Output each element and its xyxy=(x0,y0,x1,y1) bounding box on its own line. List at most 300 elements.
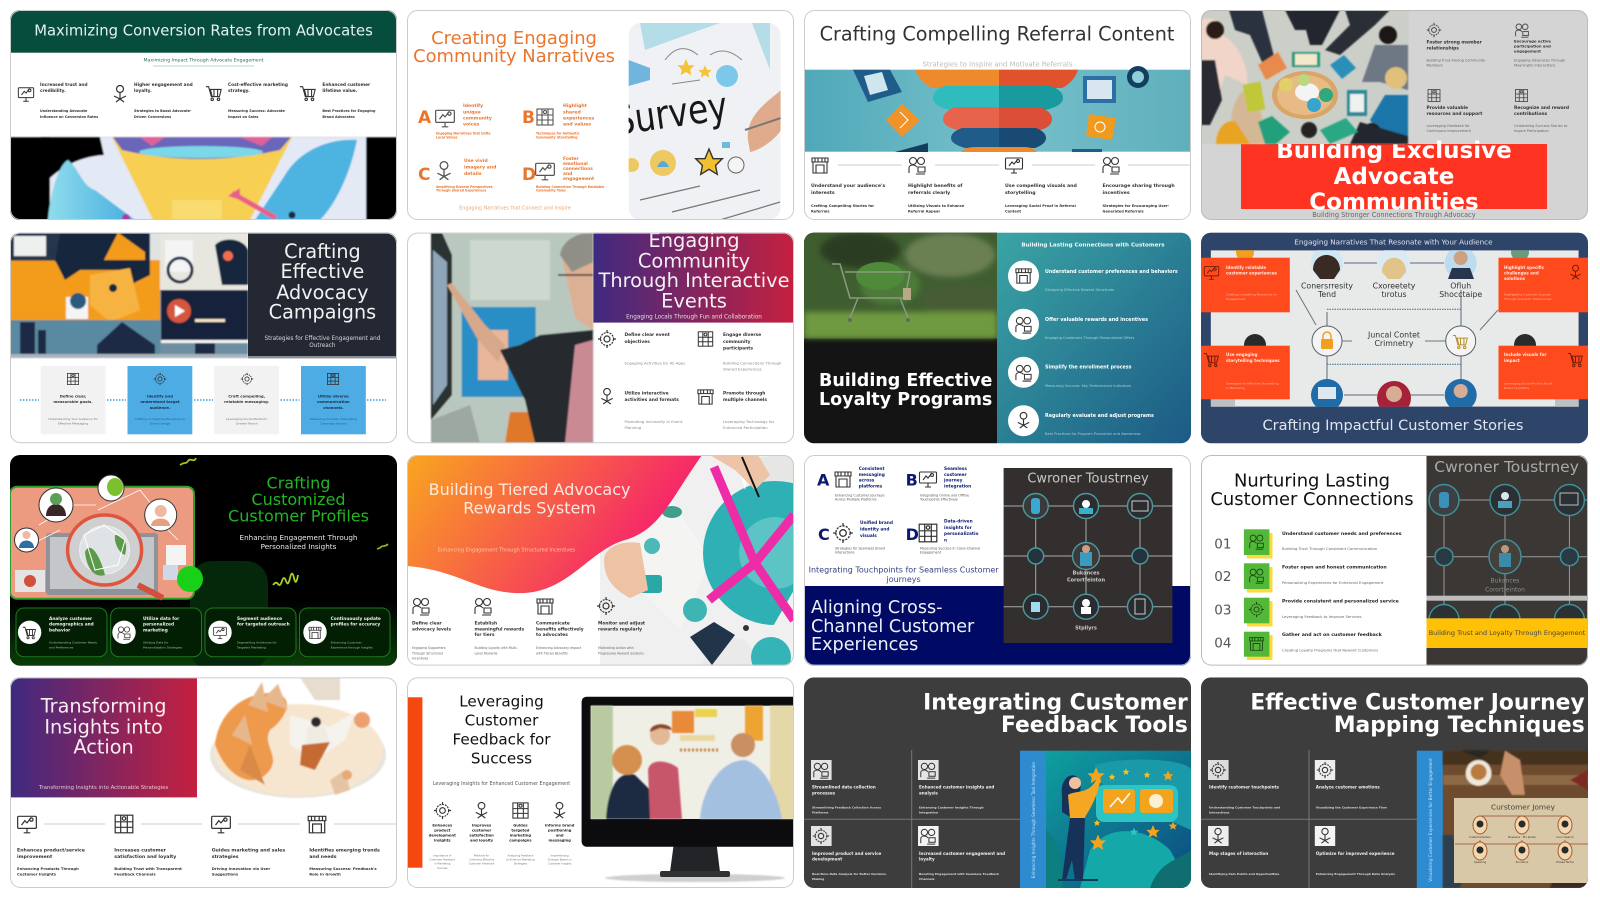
image: survey form and hand xyxy=(628,23,781,219)
image: collage illustration xyxy=(10,233,248,358)
item: enrollment xyxy=(1008,357,1132,388)
item: activities: activities and formats xyxy=(624,397,679,403)
column: brand: Customer Insights xyxy=(548,862,572,866)
column: brand: Implementing xyxy=(551,854,569,858)
column: brand: and xyxy=(556,834,564,838)
row 01: 01 xyxy=(1214,536,1231,552)
item C: C xyxy=(818,525,830,544)
title: Effective xyxy=(281,260,364,283)
column: rewards: for tiers xyxy=(474,632,495,638)
panel: Leveraging Customer Feedback for Success xyxy=(407,677,802,888)
item: participants xyxy=(698,332,782,372)
card: messaging: Leveraging Social Media for xyxy=(226,417,268,421)
item C xyxy=(818,520,893,554)
row 04: Gather and act on customer feedback xyxy=(1282,632,1383,638)
item D xyxy=(522,156,604,192)
connector dots xyxy=(20,399,386,401)
item C: Amplifying Diverse Perspectives xyxy=(436,185,493,189)
step 4 xyxy=(308,816,380,876)
title box xyxy=(1241,144,1547,209)
title: Community xyxy=(638,250,750,272)
column: product: in Marketing xyxy=(434,862,451,866)
image: funnel illustration xyxy=(10,137,397,222)
step 1: improvement xyxy=(17,854,53,860)
item C: imagery and xyxy=(464,165,496,171)
column: benefits: to advocates xyxy=(536,632,568,638)
column: brand: positioning xyxy=(548,828,572,832)
dark green backdrop xyxy=(10,600,397,666)
title: Customer xyxy=(465,712,539,730)
diagram: customer journey board: Corortfeinton xyxy=(1067,578,1105,584)
title: Action xyxy=(73,735,134,758)
process line xyxy=(838,164,1190,166)
item: preferences: Understand customer preferences and behaviors xyxy=(1045,269,1178,275)
step 1 xyxy=(17,816,85,876)
right panel xyxy=(997,233,1191,444)
callout: experiences: customer experiences xyxy=(1226,270,1277,276)
column: monitor: Progressive Reward Systems xyxy=(598,651,644,655)
item D: emotional xyxy=(563,161,588,167)
item: objectives: Engaging Activities for All Ages xyxy=(624,360,685,366)
item: relationships: Members xyxy=(1426,64,1443,68)
title: Crafting xyxy=(284,240,361,263)
item D xyxy=(906,518,980,554)
item: recognition: contributions xyxy=(1514,111,1548,117)
column: campaigns: to Enhance Marketing xyxy=(506,858,535,862)
callout: experiences xyxy=(1201,258,1290,312)
column: campaigns: Guides xyxy=(513,824,528,828)
card: data: Utilize data for xyxy=(143,616,180,622)
item: recognition: Celebrating Success Stories to xyxy=(1514,124,1567,128)
cell: insights: Integration xyxy=(919,811,938,815)
title: Feedback for xyxy=(452,730,551,748)
item B: B xyxy=(522,108,535,128)
column: campaigns: marketing xyxy=(510,834,531,838)
column: rewards: Building Loyalty with Multi- xyxy=(474,646,518,650)
callout: storytelling: storytelling techniques xyxy=(1226,358,1280,363)
card: data: marketing xyxy=(143,627,168,633)
item: cost: Cost-effective marketing xyxy=(228,82,288,88)
item: resources: Provide valuable xyxy=(1426,105,1468,111)
diagram: customer network xyxy=(1211,243,1579,415)
column: levels xyxy=(411,598,451,660)
card: demographics: Analyze customer xyxy=(49,616,93,622)
item C: Through Shared Experiences xyxy=(436,188,486,192)
step 1: Referrals xyxy=(811,210,830,214)
column: monitor xyxy=(597,597,645,655)
title: Mapping Techniques xyxy=(1334,713,1585,738)
diagram: customer journey board: Bukances xyxy=(1491,578,1519,585)
gradient wave xyxy=(407,455,702,593)
column: satisfaction: and loyalty xyxy=(470,838,494,842)
item A: Enhancing Customer Journeys xyxy=(835,493,885,497)
item: activities: Planning xyxy=(624,425,642,430)
column: rewards: Level Rewards xyxy=(474,651,498,655)
card: demographics: behavior xyxy=(49,627,71,633)
step 1: Enhances product/service xyxy=(17,848,85,854)
column: brand: Informs brand xyxy=(545,824,575,828)
card: audience: understand target xyxy=(140,399,180,404)
cell: product xyxy=(811,826,888,881)
title: Advocate xyxy=(1334,164,1454,190)
panel: Creating Engaging Community Narratives xyxy=(414,23,781,219)
title: Nurturing Lasting xyxy=(1234,471,1390,492)
item: participation: Meaningful Interactions xyxy=(1514,64,1555,68)
item: evaluate: Regularly evaluate and adjust programs xyxy=(1045,413,1154,419)
cell: stages: Map stages of interaction xyxy=(1209,851,1268,856)
item D: connections xyxy=(563,166,593,172)
step 2: Utilizing Visuals to Enhance xyxy=(908,204,965,208)
diagram: customer journey board xyxy=(1004,468,1172,643)
subtitle: Strategies for Effective Engagement and xyxy=(264,336,381,342)
diagram: customer network: Ofluh xyxy=(1450,282,1471,290)
title: Advocacy xyxy=(276,281,369,304)
card: audience: Drive Change xyxy=(150,421,170,425)
item: trust xyxy=(18,82,98,119)
column: product: Customer Feedback xyxy=(429,858,456,862)
process line xyxy=(44,823,397,825)
panel heading: Building Lasting Connections with Customers xyxy=(1021,242,1165,248)
diagram: customer network: Juncal Contet xyxy=(1367,330,1420,340)
column: benefits xyxy=(536,599,584,655)
image: profile search illustration xyxy=(10,475,194,599)
step 3: Suggestions xyxy=(212,872,239,876)
callout: challenges: Through Authentic Testimonials xyxy=(1503,297,1552,301)
cell: data collection: Streamlining Feedback Collection Across xyxy=(812,806,881,810)
card: audience: Identify and xyxy=(147,394,173,398)
step 3: Driving Innovation via User xyxy=(212,866,270,871)
item: rewards xyxy=(1008,309,1148,340)
row 02: Personalizing Experiences for Enhanced Engagement xyxy=(1282,580,1384,585)
item: preferences xyxy=(1008,260,1178,292)
grid lines xyxy=(1201,750,1417,888)
diagram: customer journey board: Stpllyrs xyxy=(1075,626,1097,632)
item: cost: strategy. xyxy=(228,88,250,94)
callout: storytelling: Use engaging xyxy=(1226,352,1258,357)
item B: experiences xyxy=(563,116,595,122)
column: product: insights xyxy=(434,838,451,842)
title: Building Effective xyxy=(819,371,993,391)
subtitle: Personalized Insights xyxy=(261,542,337,551)
cell: data collection: processes xyxy=(812,790,836,795)
title: Crafting xyxy=(267,474,330,492)
step 1: Customer Insights xyxy=(17,872,57,876)
item B: Techniques for Authentic xyxy=(536,132,580,136)
row 01: Building Trust Through Consistent Communication xyxy=(1282,546,1378,551)
card: channels: Measuring Success: Evaluating xyxy=(310,417,357,421)
item: participation: Engaging Advocates Through xyxy=(1514,58,1565,62)
item: preferences: Designing Effective Reward Structures xyxy=(1045,288,1114,292)
item: recognition: Recognize and reward xyxy=(1514,105,1569,111)
item: participation xyxy=(1514,24,1565,68)
item: participants: Building Connections Through xyxy=(723,360,782,366)
subtitle: Engaging Locals Through Fun and Collaboration xyxy=(626,314,762,320)
column: satisfaction xyxy=(469,802,495,866)
subtitle: Building Stronger Connections Through Advocacy xyxy=(1312,211,1476,219)
subtitle: Enhancing Engagement Through Structured Incentives xyxy=(438,548,575,554)
diagram: customer network: Conersrresity xyxy=(1301,282,1353,290)
cell: product: Making xyxy=(812,877,824,881)
item: relationships: relationships xyxy=(1426,46,1459,52)
card: demographics: and Preferences xyxy=(49,645,74,649)
column: product: product xyxy=(434,828,451,832)
title band xyxy=(10,10,397,53)
callout: visuals: Brand Credibility xyxy=(1504,386,1529,390)
callout: challenges xyxy=(1498,258,1588,312)
panel: Transforming Insights into Action xyxy=(10,677,397,888)
diagram: customer network: Shocctaipe xyxy=(1439,290,1482,299)
accent bar xyxy=(407,697,422,868)
panel: Crafting Impactful Customer Stories xyxy=(1201,233,1588,444)
item D: personalizatio xyxy=(944,531,978,537)
item: resources: Leveraging Feedback for xyxy=(1426,124,1470,128)
card: segments xyxy=(205,608,296,657)
card: updates: Continuously update xyxy=(331,616,381,622)
item: engagement xyxy=(114,82,193,119)
panel: Building Effective Loyalty Programs xyxy=(804,232,1191,444)
column: campaigns: targeted xyxy=(511,828,530,832)
column: benefits: Communicate xyxy=(536,621,570,627)
item: relationships: Foster strong member xyxy=(1426,40,1483,46)
card: goals: Effective Messaging xyxy=(58,421,88,425)
diagram: customer network: tırotus xyxy=(1381,290,1407,299)
column: rewards: Establish xyxy=(474,621,497,627)
item: relationships xyxy=(1426,23,1485,68)
item B: Seamless xyxy=(944,466,967,472)
side bar xyxy=(1417,751,1443,889)
card: updates: Enhancing Customer xyxy=(331,640,363,644)
step 4: Identifies emerging trends xyxy=(309,848,380,854)
column: brand: Changes Based on xyxy=(548,858,572,862)
cell: product: development xyxy=(812,857,842,862)
image: woman rating with stars xyxy=(1046,751,1191,889)
item D: insights for xyxy=(944,525,973,531)
title block xyxy=(248,233,397,356)
item: cost: Impact on Sales xyxy=(228,115,258,119)
item: enrollment: Measuring Success: Key Performance Indicators xyxy=(1045,384,1131,388)
image: journey map on wooden table: Customerization xyxy=(1469,835,1491,839)
title: Engaging xyxy=(648,229,740,252)
callout: storytelling xyxy=(1201,346,1290,399)
callout: challenges: Highlighting Customer Success xyxy=(1504,292,1551,296)
item: evaluate xyxy=(1008,405,1154,436)
step 4: Encourage sharing through xyxy=(1102,183,1175,189)
item: lifetime value: Best Practices for Engaging xyxy=(322,109,376,113)
card: goals: Understanding Your Audience for xyxy=(48,417,98,421)
title: Community Narratives xyxy=(413,46,615,67)
step 2 xyxy=(908,158,965,214)
card: demographics xyxy=(16,608,107,657)
item: engagement: Driven Conversions xyxy=(134,115,171,119)
title: Through Interactive xyxy=(597,269,790,292)
image: hand xyxy=(604,542,648,598)
callout: challenges: solutions xyxy=(1504,276,1526,281)
column: satisfaction: Methods for xyxy=(474,854,490,858)
item B xyxy=(906,466,971,501)
item B: and values xyxy=(563,122,591,128)
item D: Engagement xyxy=(920,550,942,554)
cell: data collection xyxy=(811,760,881,815)
cell: engagement: loyalty xyxy=(919,857,935,862)
banner: Building Trust and Loyalty Through Engagement xyxy=(1429,629,1586,637)
title: Insights into xyxy=(44,715,163,738)
item: enrollment: Simplify the enrollment process xyxy=(1045,364,1132,370)
card: audience xyxy=(128,366,192,434)
column: satisfaction: customer xyxy=(472,828,492,832)
item: engagement: loyalty. xyxy=(134,88,152,94)
heading: Engaging Narratives That Resonate with Your Audience xyxy=(1294,237,1493,246)
item: objectives: Define clear event xyxy=(624,332,670,338)
step 3: Use compelling visuals and xyxy=(1005,183,1077,189)
step 2: Building Trust with Transparent xyxy=(114,866,182,871)
title: Channel Customer xyxy=(811,617,975,637)
footer caption: Engaging Narratives that Connect and Inspire xyxy=(459,206,571,212)
subtitle: Enhancing Engagement Through xyxy=(240,533,357,542)
panel: Aligning Cross-Channel Customer Experiences xyxy=(804,455,1191,666)
side bar: Enhancing Insights Through Seamless Tool Integration xyxy=(1031,761,1037,878)
item A xyxy=(418,103,492,140)
card: goals: measurable goals. xyxy=(53,399,93,404)
item: recognition: Inspire Participation xyxy=(1514,129,1549,133)
diagram: customer journey board: Bukances xyxy=(1073,570,1100,576)
card: goals xyxy=(41,366,106,434)
item D: D xyxy=(906,525,919,544)
column: rewards: meaningful rewards xyxy=(474,626,524,632)
column: satisfaction: Collecting Effective xyxy=(469,858,495,862)
step 4: Generated Referrals xyxy=(1102,210,1144,214)
panel: Building Tiered Advocacy Rewards System xyxy=(407,455,847,677)
panel: Integrating Customer Feedback Tools xyxy=(804,677,1191,889)
step 3 xyxy=(1005,158,1077,214)
row 02: 02 xyxy=(1214,569,1231,585)
banner xyxy=(1426,618,1588,648)
item A: A xyxy=(817,471,830,490)
column: levels: Engaging Supporters xyxy=(412,646,446,650)
callout: challenges: Highlight specific xyxy=(1504,265,1545,270)
item D: D xyxy=(522,165,536,185)
item: participation: participation and xyxy=(1514,44,1551,48)
cell: emotions xyxy=(1315,760,1387,810)
column: benefits: Enhancing Advocacy Impact xyxy=(536,646,582,650)
title: Crafting Impactful Customer Stories xyxy=(1263,418,1523,434)
item A xyxy=(817,466,885,501)
title: Aligning Cross- xyxy=(811,598,943,618)
card: demographics: demographics and xyxy=(49,622,94,628)
callout: experiences: Crafting Compelling Narratives for xyxy=(1226,292,1278,296)
diagram: customer network: Crimnetry xyxy=(1374,339,1414,348)
card: messaging: Craft compelling, xyxy=(228,394,266,398)
diagram: customer journey board: Corortfeinton xyxy=(1485,587,1525,594)
diagram: customer network: Tend xyxy=(1317,290,1336,299)
item: engagement: Higher engagement and xyxy=(134,82,193,88)
cell: touchpoints: Interactions xyxy=(1209,811,1230,815)
item C: Unified brand xyxy=(860,520,893,526)
card: channels xyxy=(301,366,366,434)
card: segments: Targeted Marketing xyxy=(236,645,266,649)
item B: integration xyxy=(944,484,971,490)
step 2: satisfaction and loyalty xyxy=(114,854,176,860)
column: product xyxy=(429,802,456,870)
item C: Interactions xyxy=(835,550,855,554)
side bar: Visualizing Customer Experiences for Better Engagement xyxy=(1428,758,1434,882)
card: messaging: Greater Reach xyxy=(236,421,258,425)
callout: visuals: Include visuals for xyxy=(1504,352,1546,357)
title: Customer Profiles xyxy=(228,507,369,526)
step 4 xyxy=(1102,158,1175,214)
item: trust: credibility. xyxy=(40,88,66,94)
title: Integrating Customer xyxy=(923,690,1188,715)
step 2: referrals clearly xyxy=(908,190,950,196)
image: survey form and hand: Survey xyxy=(611,82,730,145)
column: product: development xyxy=(429,834,456,838)
card: audience: audience. xyxy=(150,405,171,410)
cell: product: Real-Time Data Analysis for Better Decision- xyxy=(812,872,888,876)
column: monitor: Monitor and adjust xyxy=(598,621,645,627)
cell: engagement: Increased customer engagement and xyxy=(919,851,1005,856)
item A: unique xyxy=(463,110,481,116)
title: Communities xyxy=(1309,190,1479,216)
step 3: Content xyxy=(1005,210,1021,214)
title block xyxy=(10,677,197,797)
step 4: Measuring Success: Feedback's xyxy=(309,866,377,871)
row 03: 03 xyxy=(1214,602,1231,618)
column: monitor: rewards regularly xyxy=(598,626,642,632)
item: channels xyxy=(698,390,775,430)
title: Effective Customer Journey xyxy=(1250,690,1585,715)
title: Success xyxy=(471,749,532,767)
callout: storytelling: Strategies for Effective Storytelling xyxy=(1226,382,1279,386)
card: data: personalized xyxy=(143,622,174,628)
item A: Consistent xyxy=(859,466,885,472)
column: campaigns xyxy=(506,803,535,866)
item A: Engaging Narratives that Unite xyxy=(436,132,490,136)
cell: insights: Enhancing Customer Insights Through xyxy=(919,806,984,810)
item B xyxy=(522,103,595,140)
item: relationships: Building Trust Among Community xyxy=(1426,58,1485,62)
item B: Community Storytelling xyxy=(536,136,577,140)
item: trust: Understanding Advocate xyxy=(40,109,88,113)
item: activities: Promoting Inclusivity in Event xyxy=(624,419,683,424)
panel: Maximizing Conversion Rates from Advocates xyxy=(10,10,397,222)
diagram: customer journey board xyxy=(1426,455,1588,666)
step 4: Strategies for Encouraging User- xyxy=(1102,204,1170,208)
cell: insights xyxy=(918,760,994,815)
column: monitor: Motivating Action with xyxy=(598,646,634,650)
subtitle: journeys xyxy=(885,575,921,584)
item A: across xyxy=(859,478,875,484)
panel: Crafting Effective Advocacy Campaigns xyxy=(10,233,397,444)
item: lifetime value: Brand Advocates xyxy=(322,115,355,119)
cell: engagement: Channels xyxy=(919,877,935,881)
callout: storytelling: in Marketing xyxy=(1226,386,1245,390)
card: data: Personalization Strategies xyxy=(143,645,182,649)
cell: engagement: Boosting Engagement with Seamless Feedback xyxy=(919,872,1000,876)
item A: messaging xyxy=(859,472,885,478)
title: Crafting Compelling Referral Content xyxy=(820,22,1175,46)
row 03: Leveraging Feedback to Improve Services xyxy=(1282,614,1362,619)
step 1: interests xyxy=(811,190,835,196)
item C: visuals xyxy=(860,533,877,539)
card: messaging: relatable messaging. xyxy=(224,399,270,404)
row 01 xyxy=(1214,529,1402,558)
step 1: Understand your audience's xyxy=(811,183,885,189)
column: rewards xyxy=(474,598,524,655)
item: participation: engagement xyxy=(1514,48,1541,54)
panel: Crafting Customized Customer Profiles xyxy=(10,455,397,671)
item: trust: Increased trust and xyxy=(40,82,88,88)
item: resources xyxy=(1426,90,1482,133)
step 3: Guides marketing and sales xyxy=(212,848,285,854)
